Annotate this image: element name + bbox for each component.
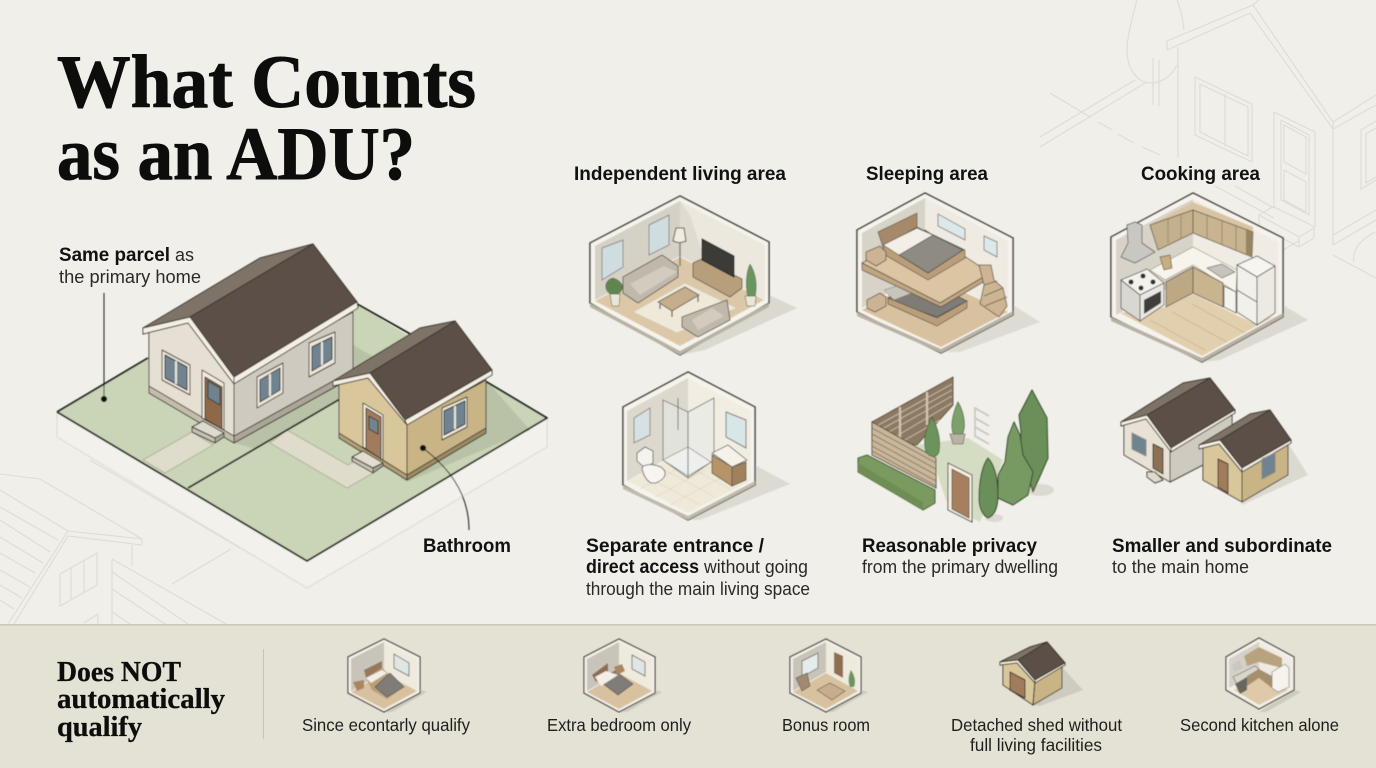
lower bed	[888, 280, 967, 317]
hood	[1121, 222, 1155, 263]
callout: same parcel: as	[175, 245, 194, 265]
ADU small house	[333, 321, 492, 480]
house shadows on lawn	[339, 345, 400, 410]
lower cabinets	[1166, 267, 1193, 307]
label: bonus room: Bonus room	[782, 715, 870, 735]
callout: same parcel: Same parcel	[59, 245, 170, 266]
icon: second kitchen	[1226, 638, 1301, 712]
callout: bathroom: Bathroom	[423, 536, 511, 557]
panel heading	[57, 657, 225, 743]
icon: kitchen cutaway	[1111, 193, 1308, 362]
stairs	[979, 265, 1007, 317]
icon: extra bedroom	[584, 639, 662, 712]
text: separate entrance: direct access	[586, 557, 699, 578]
text: separate entrance	[586, 536, 810, 599]
lamp	[679, 242, 681, 266]
tile grid	[640, 457, 730, 505]
text: smaller and subordinate: Smaller and subordinate	[1112, 536, 1332, 557]
text: smaller and subordinate	[1112, 536, 1332, 577]
heading: cooking area: Cooking area	[1141, 164, 1260, 185]
window	[634, 408, 650, 443]
toilet	[637, 447, 653, 468]
back fence	[872, 377, 953, 445]
title	[57, 41, 476, 196]
label: detached shed: Detached shed without	[951, 715, 1122, 735]
upper cabinets	[1150, 210, 1193, 250]
label: detached shed	[951, 715, 1122, 755]
door	[948, 463, 972, 522]
text: separate entrance: without going	[703, 557, 808, 577]
fridge	[1237, 256, 1275, 277]
title: What Counts	[57, 41, 476, 124]
label: since econtarly qualify: Since econtarly qualify	[302, 715, 470, 735]
callout: same parcel: the primary home	[59, 267, 201, 287]
trees	[1026, 484, 1054, 496]
upper bed	[878, 213, 917, 247]
TV stand	[693, 259, 742, 297]
primary home	[143, 244, 358, 443]
counter	[1150, 247, 1237, 292]
armchair sofa	[682, 300, 730, 337]
windows	[162, 350, 190, 395]
plants	[606, 264, 756, 306]
loft platform	[862, 230, 990, 303]
panel heading: automatically	[57, 684, 225, 715]
side fence	[872, 422, 936, 488]
text: reasonable privacy: from the primary dwelling	[862, 557, 1058, 577]
label: detached shed: full living facilities	[970, 735, 1102, 755]
wall rack	[975, 407, 989, 444]
icon: privacy fence, hedge and trees	[858, 377, 1054, 522]
icon: two houses, primary and smaller ADU	[1121, 378, 1308, 505]
sofa	[623, 255, 678, 303]
background line art: bottom left house	[0, 460, 240, 624]
icon: detached shed	[1000, 642, 1083, 706]
icon: living room cutaway	[590, 196, 797, 355]
rug	[633, 283, 737, 333]
heading: sleeping area: Sleeping area	[866, 164, 988, 185]
sink and dishwasher	[1207, 264, 1235, 278]
illustration: parcel with primary home and ADU	[57, 244, 547, 588]
hedge	[858, 455, 935, 510]
panel heading: qualify	[57, 712, 142, 743]
range	[1121, 269, 1164, 295]
mirror	[726, 412, 746, 448]
icon: bonus room	[790, 639, 868, 712]
label: extra bedroom only: Extra bedroom only	[547, 715, 691, 735]
living room windows	[602, 240, 623, 280]
coffee table	[658, 287, 699, 311]
icon: sleeping loft cutaway	[857, 193, 1040, 353]
TV	[702, 239, 734, 277]
icon: bathroom cutaway	[623, 372, 790, 520]
callout: same parcel	[59, 245, 201, 287]
shower	[663, 398, 714, 478]
callout leader lines	[101, 293, 469, 530]
text: separate entrance: Separate entrance /	[586, 536, 765, 557]
windows	[938, 214, 965, 240]
parcel base slab	[57, 412, 547, 588]
label: second kitchen alone: Second kitchen alone	[1180, 715, 1339, 735]
potted plants	[925, 417, 940, 456]
step	[192, 421, 224, 438]
parcel lawn	[57, 269, 547, 561]
text: separate entrance: through the main living space	[586, 579, 810, 599]
background line art: top right house	[1040, 0, 1376, 278]
walkways	[143, 430, 373, 488]
text: reasonable privacy	[862, 536, 1058, 577]
panel heading: Does NOT	[57, 657, 181, 688]
text: reasonable privacy: Reasonable privacy	[862, 536, 1037, 557]
ground	[917, 438, 1003, 522]
heading: independent living area: Independent living area	[574, 164, 786, 185]
vanity	[712, 445, 747, 467]
panel: does not automatically qualify	[0, 624, 1376, 768]
title: as an ADU?	[57, 113, 415, 196]
jar	[1160, 255, 1172, 270]
parcel boundary	[57, 300, 547, 561]
text: smaller and subordinate: to the main home	[1112, 557, 1249, 577]
door	[202, 370, 224, 430]
icon: bedroom	[348, 639, 427, 712]
